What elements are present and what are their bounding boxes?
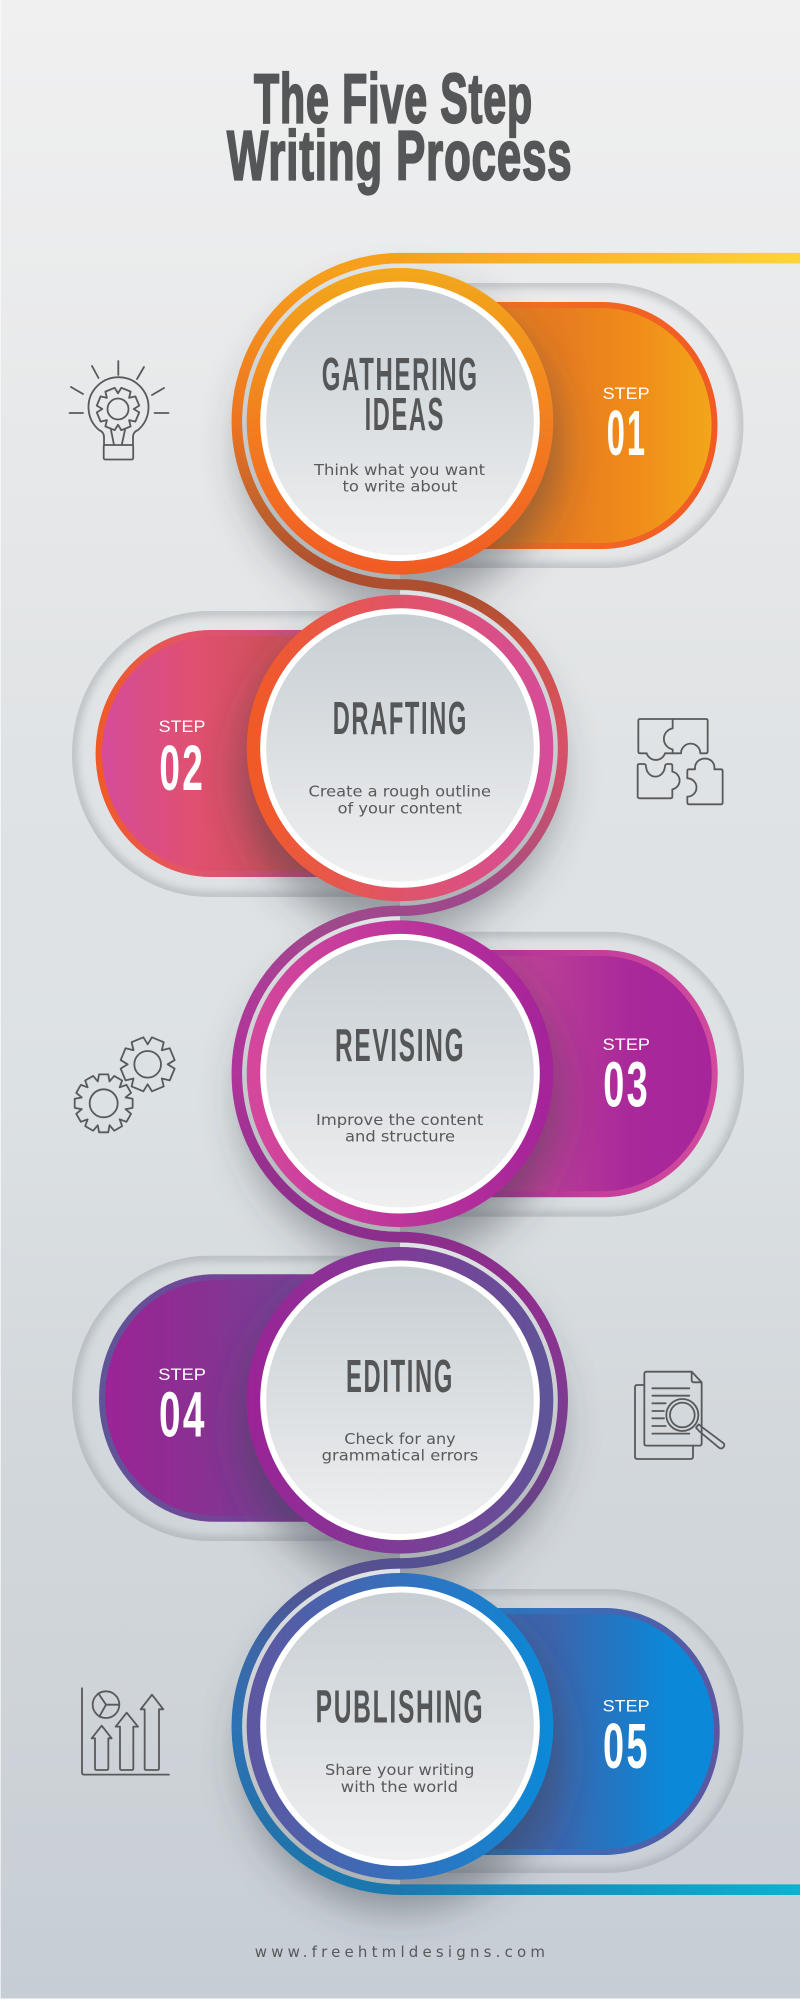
description: publishing (325, 1761, 474, 1796)
panel: step 05 capsule (446, 1589, 744, 1873)
panel: disc revising (247, 920, 553, 1227)
title: Writing Process (227, 116, 572, 194)
title: The Five Step (254, 59, 533, 137)
footer url: www.freehtmldesigns.com (255, 1943, 545, 1961)
step label 04 (158, 1365, 207, 1451)
description: editing: grammatical errors (322, 1447, 478, 1465)
heading: gathering ideas: IDEAS (365, 388, 445, 440)
step label 05: STEP (603, 1697, 650, 1716)
step label 02: STEP (159, 717, 205, 736)
icon: document with magnifier (635, 1372, 724, 1459)
description: revising: and structure (345, 1128, 455, 1146)
step label 05 (603, 1697, 650, 1782)
panel: disc gathering ideas (247, 268, 553, 575)
step label 02: 02 (159, 732, 205, 804)
step label 04: STEP (158, 1365, 206, 1384)
heading: editing: EDITING (346, 1350, 454, 1402)
step label 01: 01 (607, 397, 647, 469)
panel: step 02 capsule (72, 611, 363, 897)
step label 04: 04 (159, 1379, 207, 1451)
description: drafting: Create a rough outline (308, 783, 491, 801)
description: gathering ideas: Think what you want (313, 461, 485, 479)
thin gray rings between ribbon and discs (244, 266, 555, 1882)
step label 02 (159, 717, 205, 804)
step label 03: 03 (603, 1049, 650, 1121)
connecting ribbon (237, 258, 800, 1890)
description: gathering ideas: to write about (342, 478, 458, 496)
step label 03 (603, 1035, 650, 1121)
panel: disc drafting (247, 595, 553, 901)
panel: step 04 capsule (72, 1256, 348, 1541)
description: publishing: Share your writing (325, 1761, 474, 1779)
icon: light bulb with gear (70, 361, 168, 460)
heading: revising: REVISING (335, 1019, 465, 1071)
heading: gathering ideas: GATHERING (322, 348, 479, 400)
heading: publishing: PUBLISHING (316, 1681, 484, 1733)
title (227, 59, 572, 194)
icon: gears (75, 1037, 175, 1132)
step label 01: STEP (603, 384, 650, 403)
panel: step 01 capsule (240, 283, 744, 568)
icon: puzzle pieces (638, 719, 723, 804)
description: revising: Improve the content (316, 1111, 483, 1129)
description: editing (322, 1430, 478, 1465)
step label 03: STEP (603, 1035, 650, 1054)
description: editing: Check for any (344, 1430, 456, 1448)
heading: gathering ideas (322, 348, 479, 440)
icon: growth chart (82, 1688, 169, 1775)
panel: disc publishing (247, 1573, 553, 1880)
disc drop shadows (242, 288, 558, 1910)
description: drafting (308, 783, 491, 817)
description: drafting: of your content (338, 799, 462, 817)
description: revising (316, 1111, 483, 1146)
description: publishing: with the world (341, 1778, 458, 1796)
panel: step 03 capsule (240, 932, 744, 1217)
step label 05: 05 (603, 1710, 650, 1782)
step label 01 (603, 384, 650, 469)
heading: drafting: DRAFTING (333, 692, 468, 744)
panel: disc editing (247, 1247, 553, 1554)
description: gathering ideas (313, 461, 485, 496)
